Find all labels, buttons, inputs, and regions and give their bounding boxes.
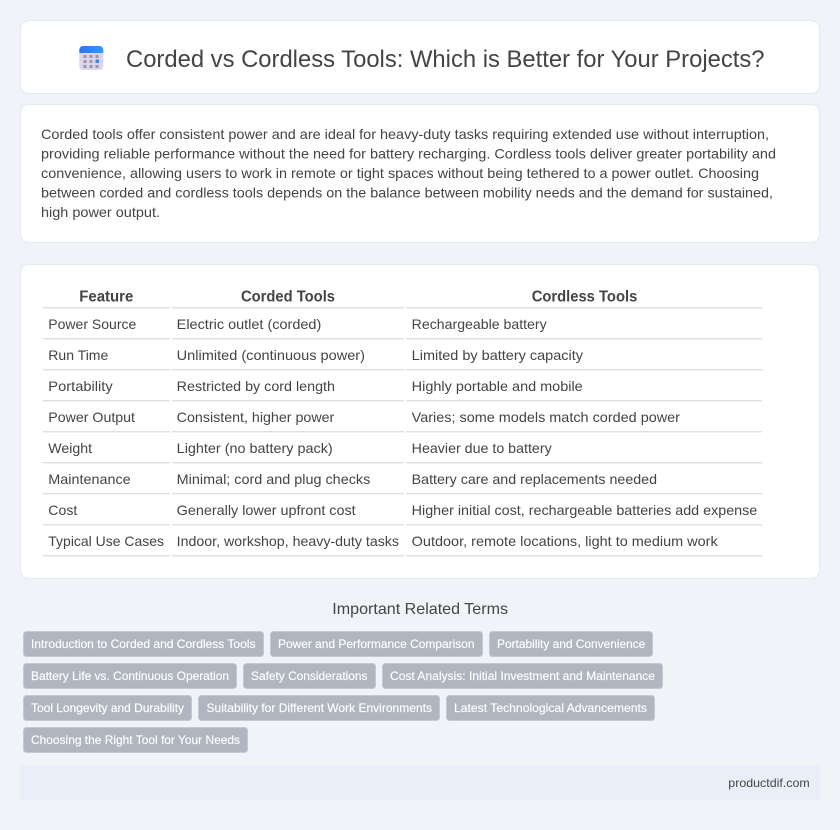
row: weight: Weight	[48, 440, 92, 456]
tag: power and performance: Power and Performance Comparison	[278, 637, 474, 651]
tag: choosing	[24, 728, 248, 752]
tag: cost analysis	[382, 664, 662, 688]
tag: cost analysis: Cost Analysis: Initial Investment and Maintenance	[390, 669, 655, 683]
tag: introduction	[24, 632, 264, 656]
related terms tags	[24, 632, 662, 752]
row: weight: Lighter (no battery pack)	[177, 440, 333, 456]
panel: header	[20, 20, 820, 94]
row: maintenance: Battery care and replacements needed	[412, 471, 657, 487]
intro paragraph: high power output.	[41, 204, 160, 220]
row: typical use cases	[43, 533, 762, 556]
row: cost	[43, 502, 762, 525]
row: run time: Run Time	[48, 347, 109, 363]
row: portability: Portability	[48, 378, 113, 394]
tag: battery life: Battery Life vs. Continuous Operation	[31, 669, 229, 683]
row: power output: Consistent, higher power	[177, 409, 335, 425]
row: weight	[43, 440, 762, 463]
tag: latest advancements: Latest Technological Advancements	[454, 701, 647, 715]
row: run time	[43, 347, 762, 370]
row: run time: Unlimited (continuous power)	[177, 347, 365, 363]
row: power source: Power Source	[48, 316, 137, 332]
table header row: Corded Tools	[241, 288, 335, 306]
row: power source: Electric outlet (corded)	[177, 316, 321, 332]
footer	[20, 766, 820, 800]
tag: suitability	[198, 696, 440, 720]
row: power output: Power Output	[48, 409, 135, 425]
row: portability: Restricted by cord length	[177, 378, 335, 394]
row: typical use cases: Indoor, workshop, heavy-duty tasks	[177, 533, 399, 549]
tag: introduction: Introduction to Corded and Cordless Tools	[31, 637, 256, 651]
panel: introduction	[20, 104, 820, 242]
title: Corded vs Cordless Tools: Which is Better for Your Projects?	[126, 46, 764, 73]
tag: longevity: Tool Longevity and Durability	[31, 701, 184, 715]
table header row	[43, 288, 762, 308]
tag: suitability: Suitability for Different Work Environments	[206, 701, 432, 715]
row: cost: Generally lower upfront cost	[177, 502, 356, 518]
tag: battery life	[24, 664, 236, 688]
tag: portability	[490, 632, 652, 656]
row: cost: Higher initial cost, rechargeable batteries add expense	[412, 502, 758, 518]
row: run time: Limited by battery capacity	[412, 347, 583, 363]
row: maintenance: Minimal; cord and plug checks	[177, 471, 370, 487]
footer: productdif.com	[728, 776, 810, 790]
intro paragraph: convenience, allowing users to work in remote or tight spaces without being tethered to a power outlet. Choosing	[41, 165, 759, 181]
table header row: Cordless Tools	[532, 288, 637, 306]
tag: longevity	[24, 696, 192, 720]
row: maintenance: Maintenance	[48, 471, 131, 487]
tag: safety: Safety Considerations	[251, 669, 368, 683]
row: weight: Heavier due to battery	[412, 440, 552, 456]
intro paragraph: between corded and cordless tools depends on the balance between mobility needs and the demand for sustained,	[41, 184, 773, 200]
row: power output: Varies; some models match corded power	[412, 409, 680, 425]
row: cost: Cost	[48, 502, 77, 518]
row: power source	[43, 316, 762, 339]
icon: calendar	[79, 46, 103, 70]
tag: choosing: Choosing the Right Tool for Your Needs	[31, 733, 240, 747]
panel: comparison table	[20, 264, 820, 578]
row: portability: Highly portable and mobile	[412, 378, 583, 394]
intro paragraph: providing reliable performance without the need for battery recharging. Cordless tools deliver greater portability and	[41, 146, 776, 162]
tag: latest advancements	[446, 696, 654, 720]
intro paragraph: Corded tools offer consistent power and are ideal for heavy-duty tasks requiring extended use without interruption,	[41, 126, 769, 142]
row: typical use cases: Outdoor, remote locations, light to medium work	[412, 533, 719, 549]
row: power output	[43, 409, 762, 432]
tag: portability: Portability and Convenience	[497, 637, 646, 651]
table header row: Feature	[79, 288, 133, 306]
heading: important related terms: Important Related Terms	[332, 601, 508, 618]
row: maintenance	[43, 471, 762, 494]
tag: safety	[244, 664, 376, 688]
row: power source: Rechargeable battery	[412, 316, 547, 332]
tag: power and performance	[270, 632, 482, 656]
intro paragraph	[41, 126, 776, 220]
row: typical use cases: Typical Use Cases	[48, 533, 164, 549]
row: portability	[43, 378, 762, 401]
